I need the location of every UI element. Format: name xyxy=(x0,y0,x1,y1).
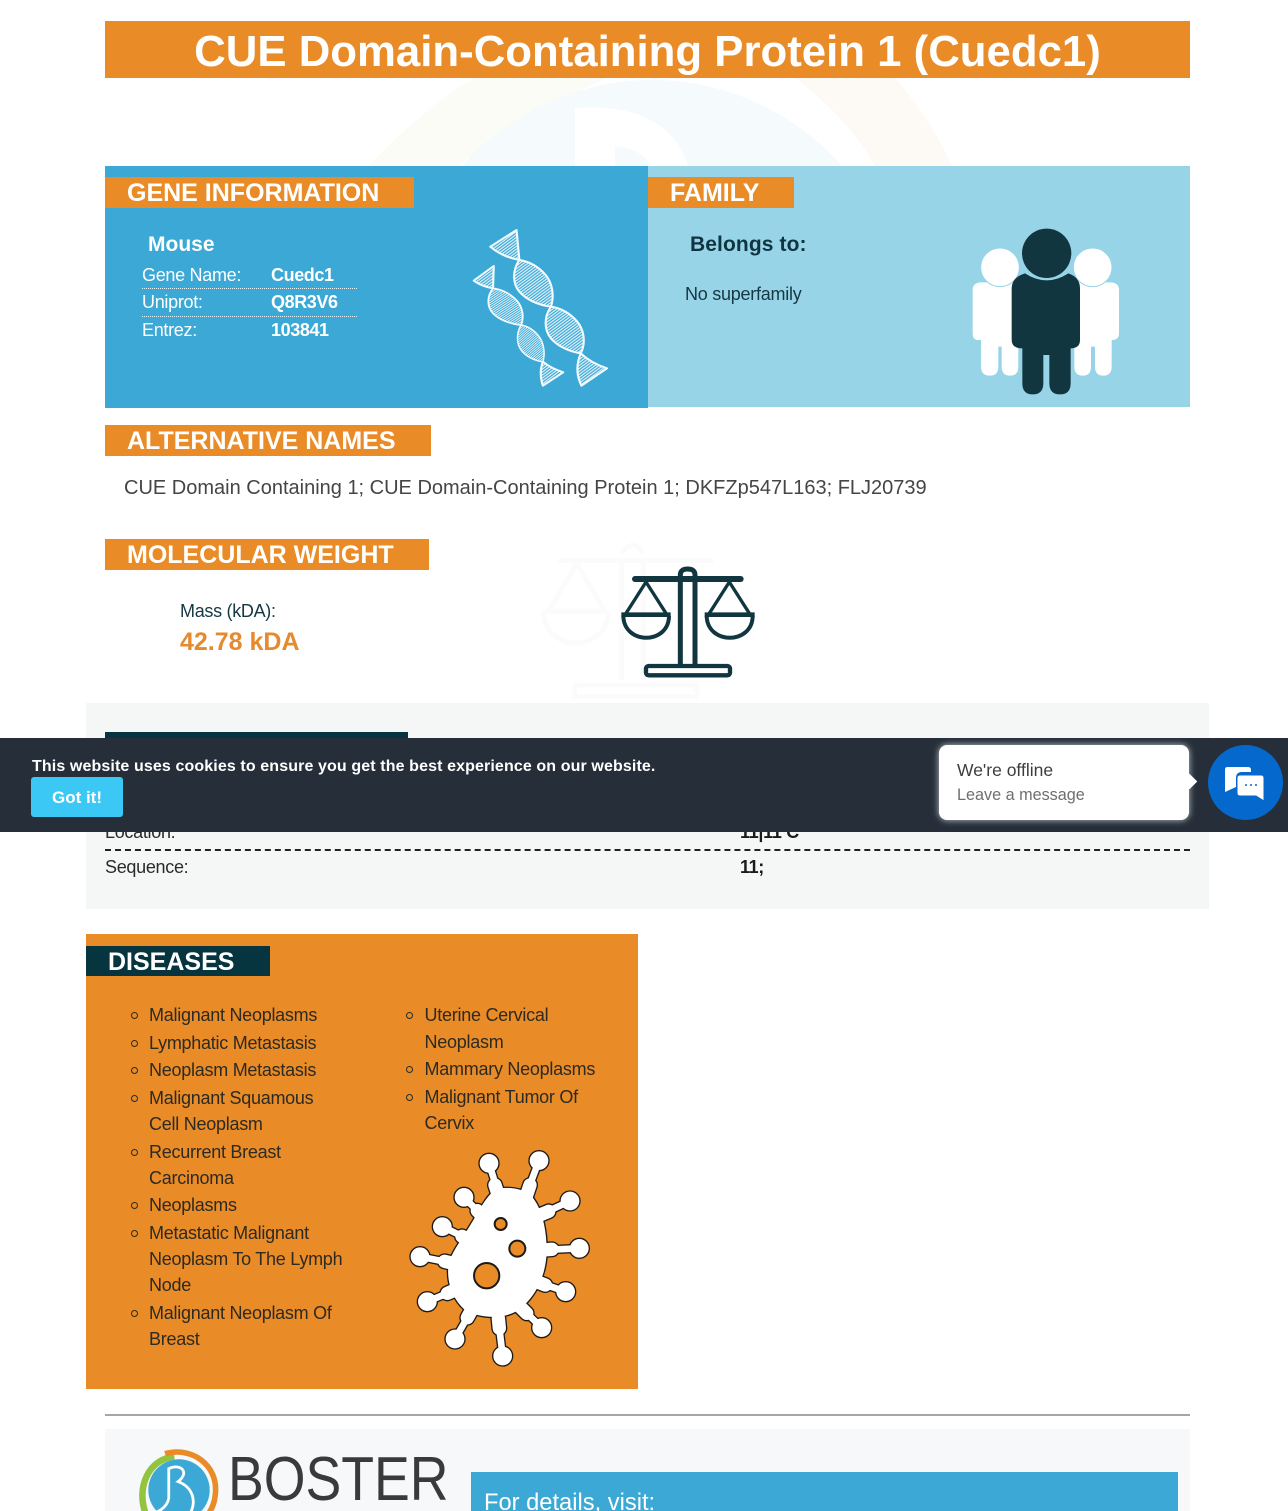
icon: chat bubbles xyxy=(1225,767,1264,800)
cookie bar xyxy=(0,738,1288,832)
sequence value: 11; xyxy=(740,857,764,877)
item: Cervix xyxy=(424,1113,474,1133)
dashed divider xyxy=(105,849,1190,851)
item: Malignant Squamous xyxy=(149,1088,313,1108)
panel: diseases xyxy=(86,934,638,1389)
row: uniprot: Uniprot: xyxy=(142,292,203,312)
list column one xyxy=(131,1005,342,1349)
callout: details xyxy=(471,1472,1178,1511)
background watermark logo xyxy=(369,78,952,166)
item: Neoplasms xyxy=(149,1195,237,1215)
item: Neoplasm xyxy=(424,1032,503,1052)
item: Mammary Neoplasms xyxy=(424,1059,595,1079)
button: got it: Got it! xyxy=(52,788,102,807)
icon: family of people xyxy=(972,228,1119,394)
item: Neoplasm Metastasis xyxy=(149,1060,316,1080)
superfamily text: No superfamily xyxy=(685,284,802,304)
heading: gene information: GENE INFORMATION xyxy=(127,179,379,207)
item: Neoplasm To The Lymph xyxy=(149,1249,342,1269)
row: entrez: 103841 xyxy=(271,320,329,340)
chat bubble: offline message xyxy=(939,745,1189,820)
item: Breast xyxy=(149,1329,199,1349)
panel: footer xyxy=(105,1429,1190,1511)
row: gene name xyxy=(142,261,357,289)
item: Malignant Neoplasms xyxy=(149,1005,317,1025)
item xyxy=(131,1088,313,1134)
species label: Mouse xyxy=(148,233,215,256)
bubble heading: We're offline xyxy=(957,760,1053,780)
icon: dna helices xyxy=(472,229,608,387)
gene info table xyxy=(142,265,357,340)
chat launcher button xyxy=(1208,745,1283,820)
belongs to label: Belongs to: xyxy=(690,233,807,256)
heading: alternative names: ALTERNATIVE NAMES xyxy=(127,427,396,455)
heading: molecular weight: MOLECULAR WEIGHT xyxy=(127,541,394,569)
row: entrez: Entrez: xyxy=(142,320,197,340)
sequence label: Sequence: xyxy=(105,857,188,877)
heading: family: FAMILY xyxy=(670,179,759,207)
item: Cell Neoplasm xyxy=(149,1114,263,1134)
panel: family xyxy=(648,166,1190,407)
panel: gray section behind cookie bar xyxy=(86,703,1209,909)
location label: Location: xyxy=(105,822,175,842)
logo: boster mark xyxy=(139,1449,218,1511)
icon: virus xyxy=(409,1150,590,1367)
heading: diseases xyxy=(86,946,270,976)
item: Uterine Cervical xyxy=(424,1005,548,1025)
watermark: faint scale xyxy=(500,530,800,703)
row: entrez xyxy=(142,320,329,340)
icon: balance scale xyxy=(621,566,755,678)
button: got it xyxy=(31,777,123,817)
mass label: Mass (kDA): xyxy=(180,601,276,621)
item xyxy=(131,1303,332,1349)
row: uniprot xyxy=(142,289,357,317)
panel: gene information xyxy=(105,166,648,408)
item: Node xyxy=(149,1275,191,1295)
item xyxy=(406,1005,548,1052)
bubble pointer xyxy=(1182,774,1197,789)
item: Malignant Tumor Of xyxy=(424,1087,578,1107)
row: uniprot: Q8R3V6 xyxy=(271,292,338,312)
footer divider xyxy=(105,1414,1190,1416)
item xyxy=(131,1142,281,1188)
item: Carcinoma xyxy=(149,1168,234,1188)
item: Recurrent Breast xyxy=(149,1142,281,1162)
alternative names text: CUE Domain Containing 1; CUE Domain-Containing Protein 1; DKFZp547L163; FLJ20739 xyxy=(124,477,927,499)
item xyxy=(131,1223,342,1295)
location value: 11|11 C xyxy=(740,822,799,842)
section heading bar xyxy=(105,732,408,763)
list column two xyxy=(406,1005,595,1133)
heading: family xyxy=(648,177,794,208)
row: gene name: Cuedc1 xyxy=(271,265,334,285)
item: Malignant Neoplasm Of xyxy=(149,1303,332,1323)
bubble subtext: Leave a message xyxy=(957,786,1085,804)
item: Lymphatic Metastasis xyxy=(149,1033,316,1053)
title banner: CUE Domain-Containing Protein 1 (Cuedc1) xyxy=(194,27,1101,76)
cookie message: This website uses cookies to ensure you get the best experience on our website. xyxy=(32,758,655,775)
row: gene name: Gene Name: xyxy=(142,265,241,285)
heading: diseases: DISEASES xyxy=(108,948,234,976)
item xyxy=(406,1087,578,1133)
mass value: 42.78 kDA xyxy=(180,628,300,656)
item: Metastatic Malignant xyxy=(149,1223,309,1243)
